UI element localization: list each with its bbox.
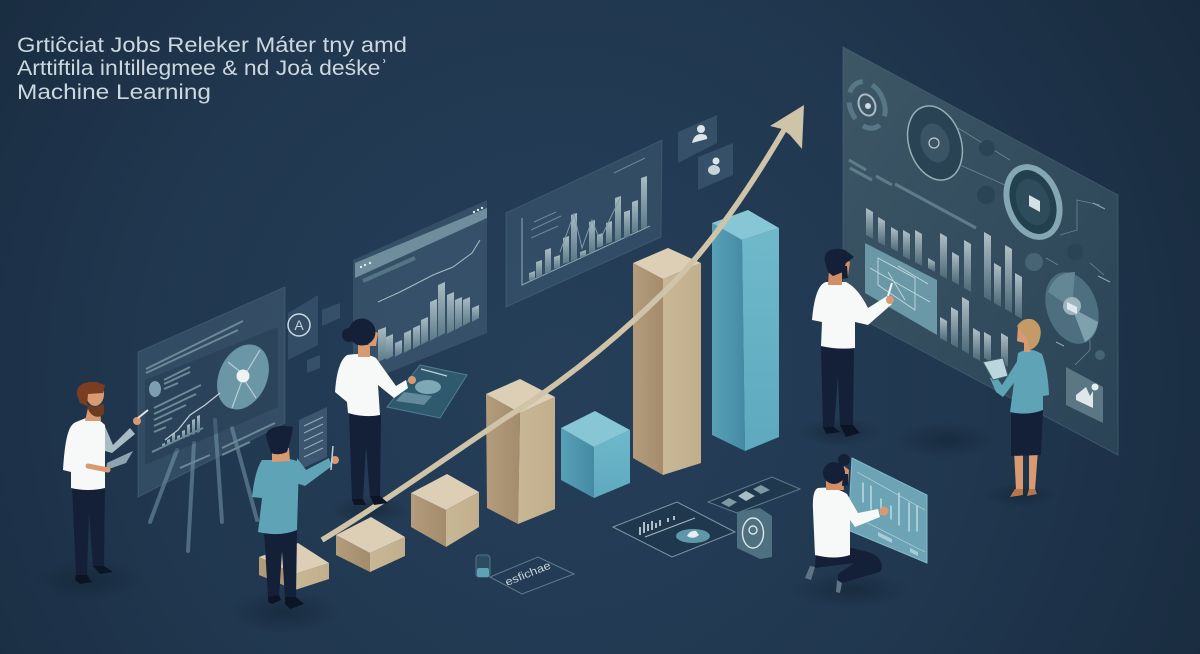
box 2 [336, 517, 405, 572]
shirt [252, 459, 299, 534]
floor card: label with glass [476, 555, 574, 594]
arm [296, 458, 332, 486]
panel: letter A badge: A [294, 317, 304, 333]
easel legs [150, 420, 257, 551]
title: Grtiĉciat Jobs Releker Máter tny amd [17, 33, 407, 57]
figure: woman with tablet [983, 319, 1049, 497]
isometric bar chart [259, 210, 779, 590]
bars [378, 282, 479, 362]
trousers [72, 485, 105, 575]
hand and pen [331, 456, 339, 464]
shoes [823, 425, 860, 437]
icon: person card [678, 115, 717, 163]
icon: location badge [737, 508, 772, 559]
board inner [145, 327, 278, 465]
figure: man in blue shirt [252, 426, 339, 609]
panel: presentation board with easel [138, 287, 285, 551]
neck [828, 270, 842, 285]
board outer [138, 287, 285, 497]
face, hair, bun [826, 478, 844, 490]
floor card: label with glass: esfichae [504, 560, 553, 589]
panel: large analytics wall [842, 47, 1118, 455]
bars lower row [940, 297, 1008, 367]
legend text chips [1056, 203, 1110, 346]
trousers [821, 345, 854, 428]
hair and beard [825, 249, 854, 276]
arm [990, 360, 1020, 397]
figure: bearded man at wall [812, 249, 894, 437]
figure: woman with bun [335, 318, 416, 505]
box 3 [411, 474, 479, 547]
panel: growth bars dashboard [506, 140, 662, 307]
arrow: growth trend [322, 105, 804, 540]
shoes [352, 496, 388, 505]
hand and pen [886, 296, 894, 304]
title [17, 33, 407, 104]
grey sleeve [104, 424, 135, 453]
blouse [1010, 350, 1049, 414]
tag chips [322, 303, 340, 326]
shirt [335, 354, 408, 416]
box 1 [259, 543, 329, 590]
face and hair [1017, 322, 1030, 352]
legs [1014, 450, 1038, 490]
panel: bar and line dashboard [353, 200, 487, 387]
figure: man with beard and tablet [63, 382, 148, 584]
floor card: chart and pie [613, 502, 735, 557]
line trend [378, 240, 480, 302]
floor card: squares [708, 477, 800, 513]
shirt [813, 488, 880, 558]
left axis labels [849, 160, 976, 228]
title: Machine Learning [17, 80, 211, 104]
axis [522, 218, 650, 285]
panel: letter A badge [288, 295, 340, 373]
icon: glass [476, 555, 490, 577]
shirt [812, 282, 892, 349]
neck and head [272, 448, 290, 462]
icon: team card [698, 143, 733, 190]
head [358, 345, 370, 357]
box 6 [633, 248, 701, 475]
box 5 [561, 411, 630, 498]
board mini bars [162, 415, 200, 447]
header band [355, 208, 487, 278]
shoes [1010, 489, 1037, 497]
shirt [63, 418, 105, 490]
forearm and tablet [106, 451, 133, 470]
donut [997, 160, 1069, 244]
hand [408, 376, 416, 384]
box 4 [486, 379, 555, 524]
hand [880, 506, 888, 516]
dashboard text [531, 158, 645, 238]
title: Arttiftila inItillegmee & nd Joȧ deśkeʾ [17, 56, 388, 80]
head [85, 408, 101, 421]
photo dot [149, 381, 161, 397]
hand with pen [133, 417, 141, 425]
boots [805, 566, 842, 593]
figure: kneeling man [805, 454, 888, 593]
shoes [75, 566, 113, 584]
image card [1066, 367, 1103, 423]
tablet [983, 358, 1008, 380]
panel: checklist [299, 407, 327, 470]
skirt [1011, 408, 1043, 456]
bars upper row [866, 208, 1022, 319]
bars [529, 176, 647, 281]
shoes [268, 595, 304, 609]
floor shadows [33, 418, 1056, 634]
ring gauge small [842, 76, 892, 134]
pie [1036, 265, 1108, 351]
node dots [977, 140, 1083, 260]
peak outlines [560, 198, 620, 252]
board line chart [165, 393, 220, 440]
board text lines [146, 321, 275, 468]
large circle gauge [899, 99, 971, 187]
trousers [264, 530, 297, 598]
panel: touch tablet floor [387, 365, 467, 418]
panel: kneeling man's blue screen [848, 458, 927, 563]
trousers [349, 412, 381, 500]
box 7 [712, 210, 779, 451]
connector lines [958, 128, 1104, 365]
board pie chart [207, 336, 279, 418]
highlighted sub panel [865, 243, 937, 335]
trousers [815, 548, 882, 584]
